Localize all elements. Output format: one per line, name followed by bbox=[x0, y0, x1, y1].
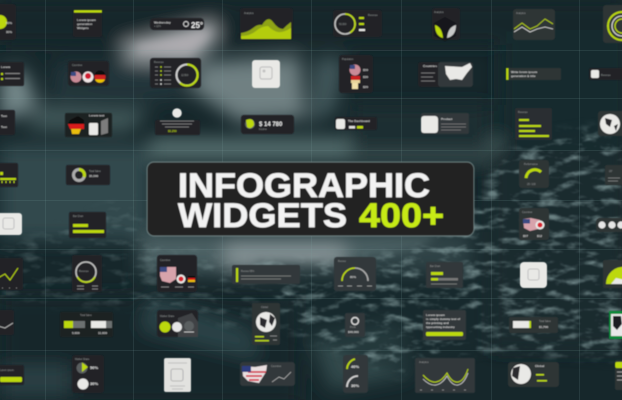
widget: donut gauge: 35,000 bbox=[89, 174, 99, 178]
widget: bars card 3: Bar Chart bbox=[430, 265, 441, 268]
widget: globe card: Global bbox=[261, 306, 268, 309]
title text line 2: 400+ bbox=[359, 197, 444, 235]
widget: Germany map card: Lorem text bbox=[89, 114, 104, 118]
widget: semicircle right bbox=[603, 260, 622, 288]
widget: circle text card bbox=[155, 108, 200, 135]
widget: leaf value bbox=[241, 115, 294, 134]
widget: US flag map card: Countries bbox=[271, 365, 282, 368]
widget: circle stat card: $40,000 bbox=[348, 330, 359, 334]
widget: text card lime button: is simply dummy text of bbox=[426, 317, 460, 321]
widget: text bar bbox=[506, 68, 561, 80]
widget: donut gauge: Total Sales bbox=[89, 170, 101, 173]
widget: two flags: $57 bbox=[523, 234, 528, 238]
widget: leaves card: Market Share bbox=[160, 315, 175, 318]
widget: product tile bbox=[335, 117, 377, 130]
widget: pies card: Market Share bbox=[75, 358, 90, 361]
widget: globe stat card bbox=[508, 362, 559, 387]
widget: white tile lower bbox=[520, 262, 547, 288]
widget: leaves card bbox=[157, 310, 198, 337]
widget: weather pill: + 12% bbox=[154, 25, 162, 28]
widget: ring card bbox=[72, 255, 102, 292]
widget: donut with list: Revenue bbox=[154, 61, 164, 64]
widget: bars card bbox=[515, 108, 552, 140]
widget: arc stats bbox=[343, 355, 368, 393]
widget: balloon flags: $30 bbox=[363, 75, 368, 79]
widget: ring card: Revenue bbox=[79, 270, 89, 273]
widget: partial donut top left bbox=[0, 4, 16, 40]
widget: text bar left bottom: Lorem ipsum bbox=[0, 369, 14, 372]
widget: weather pill: Wednesday bbox=[154, 20, 171, 24]
widget: left text row 3: Text bbox=[1, 125, 7, 129]
widget: image card: Product bbox=[441, 117, 452, 121]
widget: dual bars card: Total Sales bbox=[80, 314, 92, 317]
widget: text card lime button: typesetting industry bbox=[426, 325, 455, 329]
widget: partial donut top left: 30% bbox=[6, 30, 12, 34]
widget: line chart bottom bbox=[415, 358, 475, 393]
widget: dual bars card: 5,000 bbox=[72, 331, 80, 335]
widget: weather pill: 25° bbox=[191, 21, 203, 30]
widget: dual bars card: 11,000 bbox=[98, 331, 107, 335]
widget: flags card 2 bbox=[157, 255, 197, 292]
widget: leaf value: $ 14 780 bbox=[259, 122, 283, 128]
widget: left text row 3 bbox=[0, 110, 15, 135]
widget: weather pill bbox=[150, 18, 204, 30]
widget: globe right bbox=[598, 111, 622, 136]
widget: image card bbox=[421, 113, 469, 134]
widget: donut with list bbox=[150, 58, 201, 88]
title text line 1: INFOGRAPHIC bbox=[178, 167, 430, 205]
widget: three flags bbox=[68, 61, 109, 86]
widget: speedometer: 25 / 100 bbox=[527, 183, 536, 186]
widget: text card with lime bar: Lorem ipsum bbox=[77, 18, 96, 22]
widget: bar label card bbox=[232, 265, 300, 284]
widget: bars card 2: Bar Chart bbox=[73, 215, 84, 218]
widget: right number chip: 20° bbox=[609, 170, 613, 173]
widget: green flag card bbox=[609, 311, 622, 339]
widget: line left bbox=[0, 258, 23, 290]
widget: semicircle gauge: Review bbox=[338, 260, 346, 263]
widget: Germany map card bbox=[65, 113, 112, 137]
widget: two flags: Countries bbox=[522, 211, 533, 214]
widget: dual bars card bbox=[60, 312, 113, 337]
widget: two flags: $12 bbox=[537, 234, 542, 238]
widget: donut with stats: Revenue bbox=[368, 14, 378, 17]
widget: globe stat card: Global bbox=[535, 364, 545, 368]
title panel bbox=[147, 162, 474, 236]
widget: semicircle gauge bbox=[334, 257, 376, 291]
widget: left text list bbox=[0, 62, 24, 86]
widget: balloon flags: $50 bbox=[363, 68, 368, 72]
widget: arc stats: 30% bbox=[351, 383, 359, 388]
widget: speedometer: Performance bbox=[524, 163, 538, 166]
widget: donut with stats: 50,000 bbox=[339, 23, 347, 26]
widget: text card lime button: Lorem ipsum bbox=[426, 313, 445, 317]
widget: donut with list: 12,500 bbox=[181, 74, 189, 77]
widget: circle stat card bbox=[345, 313, 365, 337]
widget: area chart: Analytics bbox=[244, 12, 254, 15]
widget: white image tile bbox=[252, 60, 280, 88]
widget: lime right edge bbox=[615, 360, 622, 390]
widget: line chart bottom: Analytics bbox=[419, 361, 429, 364]
widget: balloon flags bbox=[339, 55, 373, 93]
widget: text card with lime bar bbox=[73, 10, 102, 37]
widget: pies card bbox=[72, 355, 104, 393]
widget: leaf value: Income bbox=[259, 128, 268, 131]
widget: text bar: generation & title bbox=[511, 74, 536, 78]
widget: bars card: Revenue bbox=[518, 111, 528, 114]
widget: partial donut top left: 50% bbox=[6, 21, 12, 25]
widget: concentric ring bbox=[603, 5, 622, 43]
widget: balloon flags: $20 bbox=[363, 85, 368, 89]
widget: left text list: Lorem bbox=[1, 65, 11, 69]
widget: US map card: Countries bbox=[423, 64, 437, 68]
widget: text card lime button: the printing and bbox=[426, 321, 449, 325]
widget: bar stat card: $1,700 bbox=[539, 325, 549, 329]
widget: three flags: Countries bbox=[72, 64, 83, 67]
widget: white tile left bbox=[0, 213, 22, 235]
widget: arc stats: 40% bbox=[351, 364, 359, 369]
widget: cube icon bbox=[432, 8, 460, 41]
widget: cube icon: Analytics bbox=[434, 11, 444, 14]
widget: area chart bbox=[240, 8, 293, 40]
widget: line chart top: Analytics bbox=[516, 12, 526, 15]
widget: text card lime button bbox=[423, 310, 466, 340]
widget: lime gauge bars left bbox=[0, 163, 18, 187]
widget: semicircle gauge: 80% bbox=[350, 275, 356, 279]
widget: speedometer bbox=[519, 160, 549, 188]
widget: bar label card: Review 95% bbox=[241, 270, 255, 273]
widget: line chart top bbox=[513, 9, 555, 40]
widget: two flags bbox=[519, 208, 549, 240]
widget: white portrait tile bbox=[164, 358, 191, 392]
widget: three circle chip bbox=[596, 218, 622, 232]
widget: bar stat card bbox=[509, 317, 558, 333]
widget: text card with lime bar: generation bbox=[77, 22, 93, 26]
widget: text card with lime bar: Widgets bbox=[77, 26, 89, 30]
widget: pies card: 30% bbox=[90, 381, 98, 386]
widget: circle stat card: Profit bbox=[350, 326, 356, 329]
widget: donut with stats bbox=[333, 10, 382, 37]
widget: circle text card: $1,250 bbox=[168, 129, 177, 133]
widget: bars card 3 bbox=[426, 262, 463, 288]
widget: bars card 2 bbox=[69, 212, 106, 238]
widget: globe card bbox=[252, 303, 280, 345]
widget: US map card bbox=[418, 62, 473, 87]
widget: bar stat card: Total Sales bbox=[539, 320, 551, 323]
widget: text bar left bottom bbox=[0, 365, 24, 385]
widget: balloon flags: Population bbox=[342, 58, 354, 61]
title text line 2: WIDGETS bbox=[178, 197, 347, 235]
widget: pies card: 50% bbox=[90, 365, 98, 370]
widget: left text row 3: Text bbox=[1, 114, 7, 118]
widget: line left lower bbox=[0, 310, 14, 335]
widget: right number chip bbox=[605, 165, 622, 185]
widget: product tile: The Dashboard bbox=[348, 119, 370, 123]
widget: flags card 2: Countries bbox=[160, 259, 171, 262]
widget: chip right bbox=[589, 68, 622, 80]
title text line 2 bbox=[178, 197, 444, 235]
widget: US flag map card bbox=[240, 362, 295, 386]
widget: donut gauge bbox=[66, 165, 110, 185]
widget: text bar: Write lorem ipsum bbox=[511, 70, 537, 74]
widget: chip right: Revenue bbox=[601, 74, 611, 77]
